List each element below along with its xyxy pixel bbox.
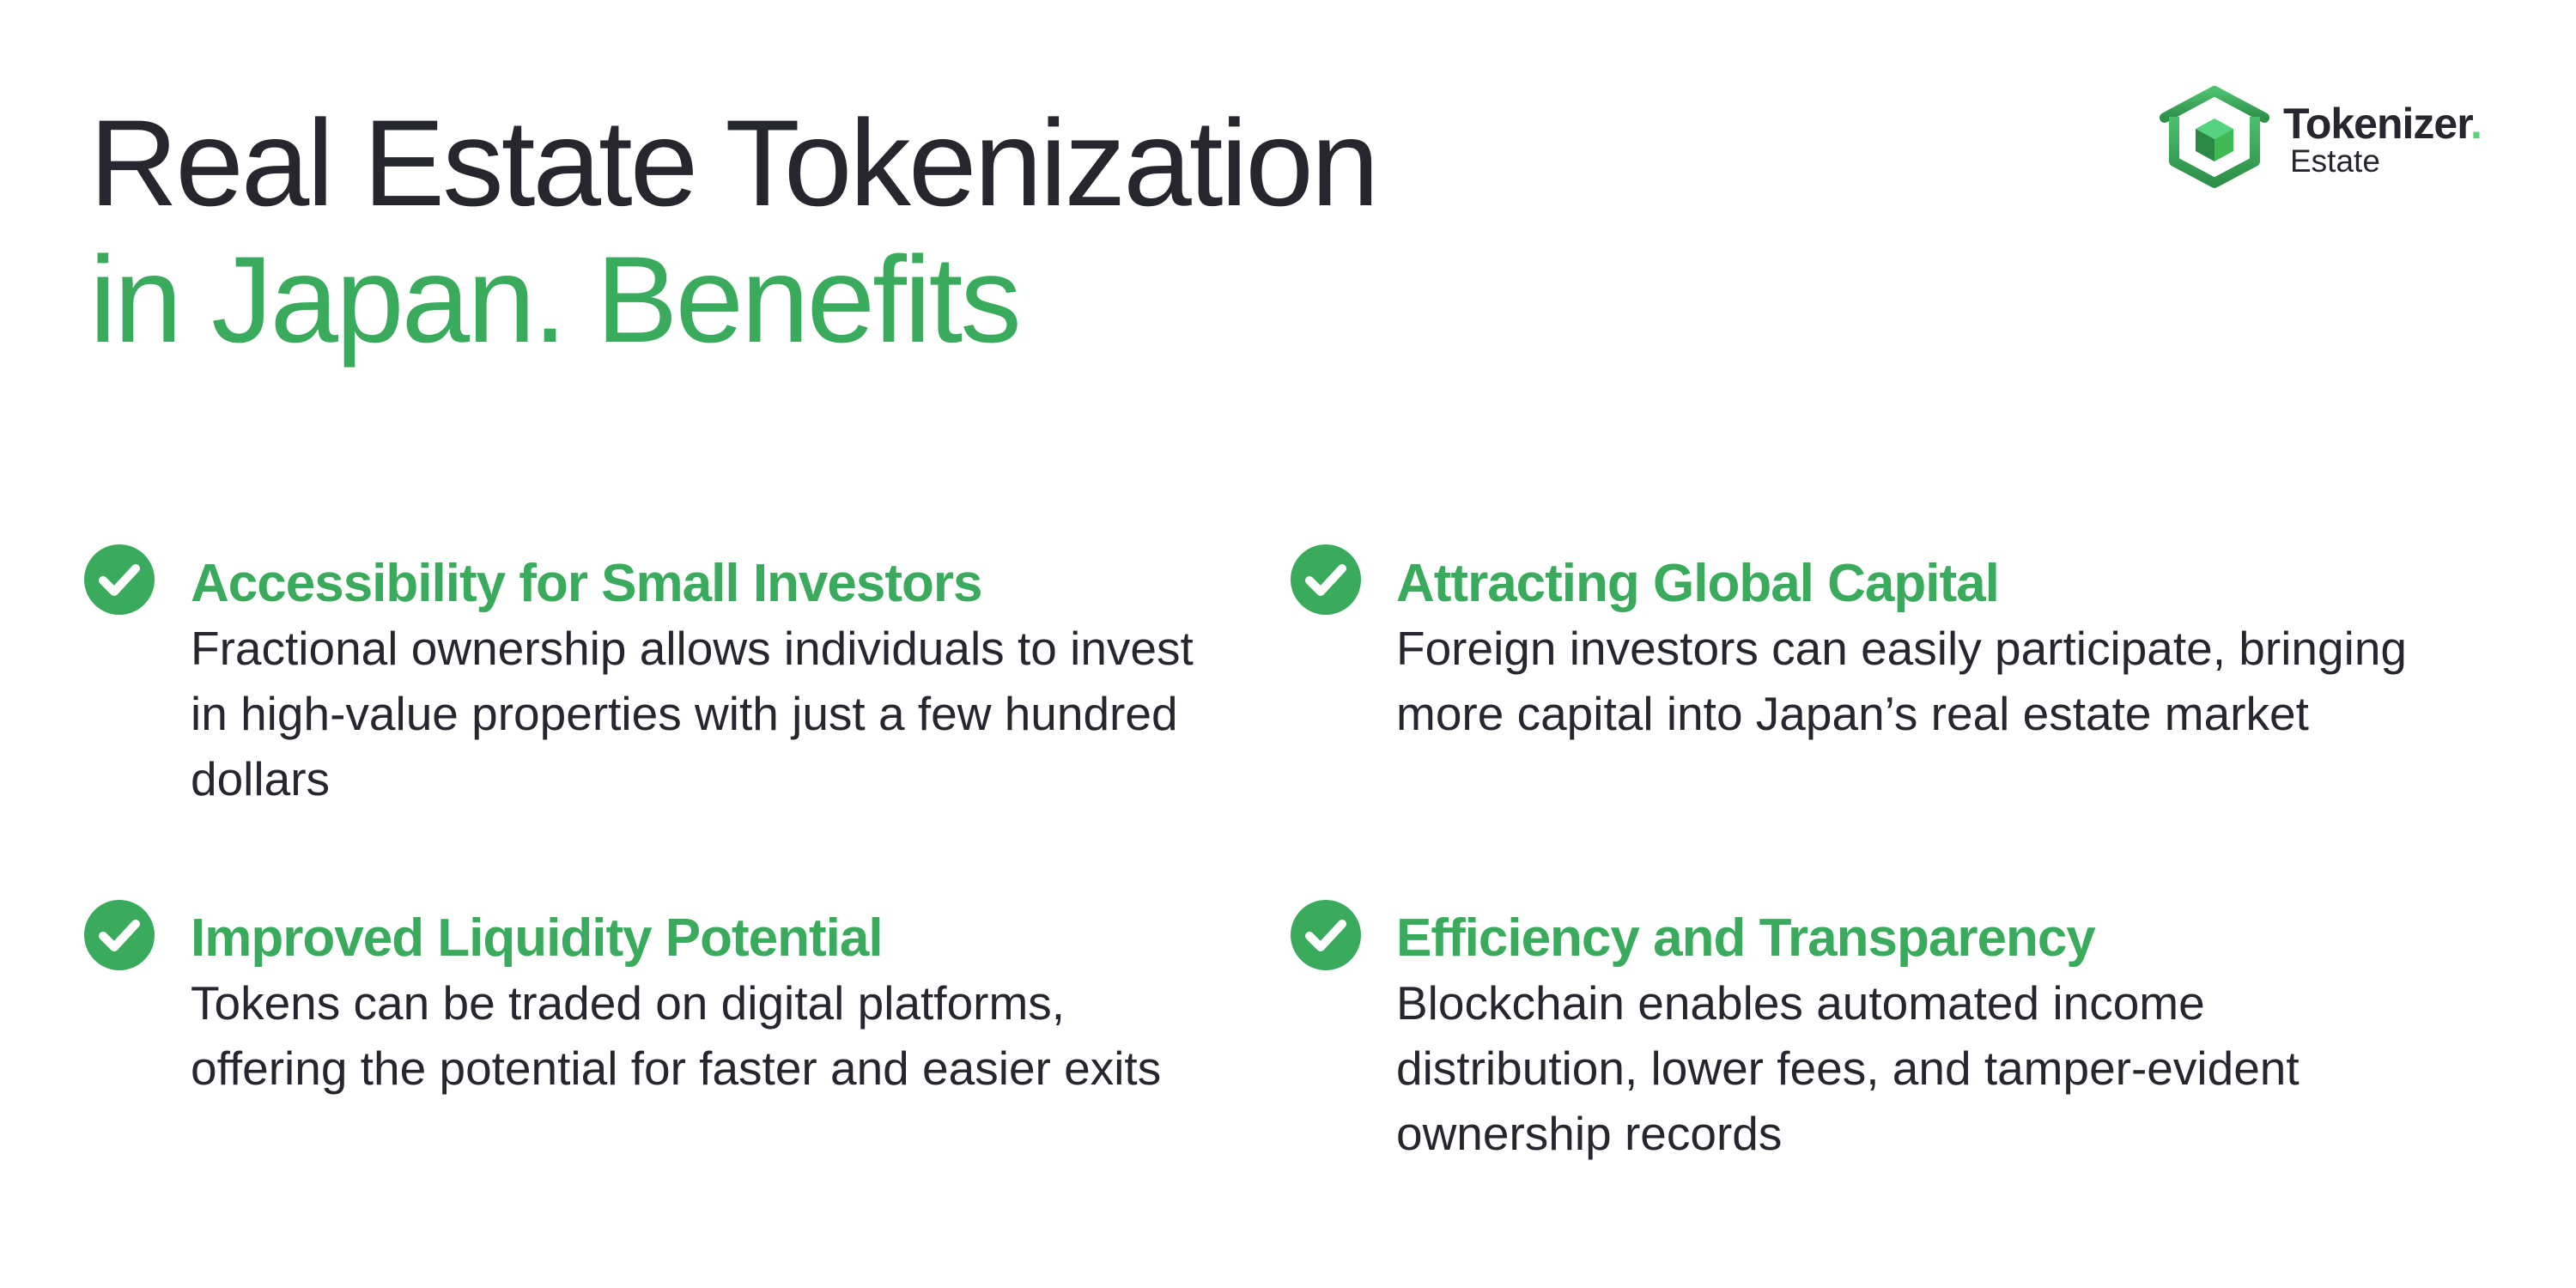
- heading: Efficiency and Transparency: [1396, 908, 2095, 968]
- logo: Estate: [2290, 143, 2380, 179]
- text: ownership records: [1396, 1107, 1782, 1160]
- heading: Accessibility for Small Investors: [191, 554, 982, 613]
- icon: check: [1291, 544, 1361, 615]
- text: [191, 622, 1194, 805]
- logo text: Tokenizer.: [2283, 100, 2482, 148]
- heading: Improved Liquidity Potential: [191, 908, 883, 968]
- heading: Attracting Global Capital: [1396, 554, 1999, 613]
- text: Tokens can be traded on digital platforms,: [191, 976, 1065, 1030]
- icon: check: [1291, 900, 1361, 970]
- title line 2: in Japan. Benefits: [89, 232, 1019, 368]
- icon: check: [84, 900, 155, 970]
- icon: check: [84, 544, 155, 615]
- text: [1396, 976, 2300, 1160]
- text: [1396, 622, 2407, 740]
- title line 1: Real Estate Tokenization: [89, 95, 1376, 232]
- title: [89, 95, 1376, 368]
- text: more capital into Japan’s real estate market: [1396, 687, 2309, 740]
- text: [191, 976, 1161, 1095]
- logo: [2160, 86, 2482, 188]
- panel: accessibility: [84, 544, 1194, 805]
- icon: house cube: [2160, 86, 2269, 188]
- text: Foreign investors can easily participate, bringing: [1396, 622, 2407, 675]
- text: distribution, lower fees, and tamper-evident: [1396, 1042, 2300, 1095]
- panel: global capital: [1291, 544, 2407, 740]
- panel: liquidity: [84, 900, 1161, 1095]
- text: dollars: [191, 752, 330, 805]
- text: Blockchain enables automated income: [1396, 976, 2205, 1030]
- text: in high-value properties with just a few hundred: [191, 687, 1178, 740]
- panel: efficiency: [1291, 900, 2300, 1160]
- text: Fractional ownership allows individuals to invest: [191, 622, 1194, 675]
- text: offering the potential for faster and easier exits: [191, 1042, 1161, 1095]
